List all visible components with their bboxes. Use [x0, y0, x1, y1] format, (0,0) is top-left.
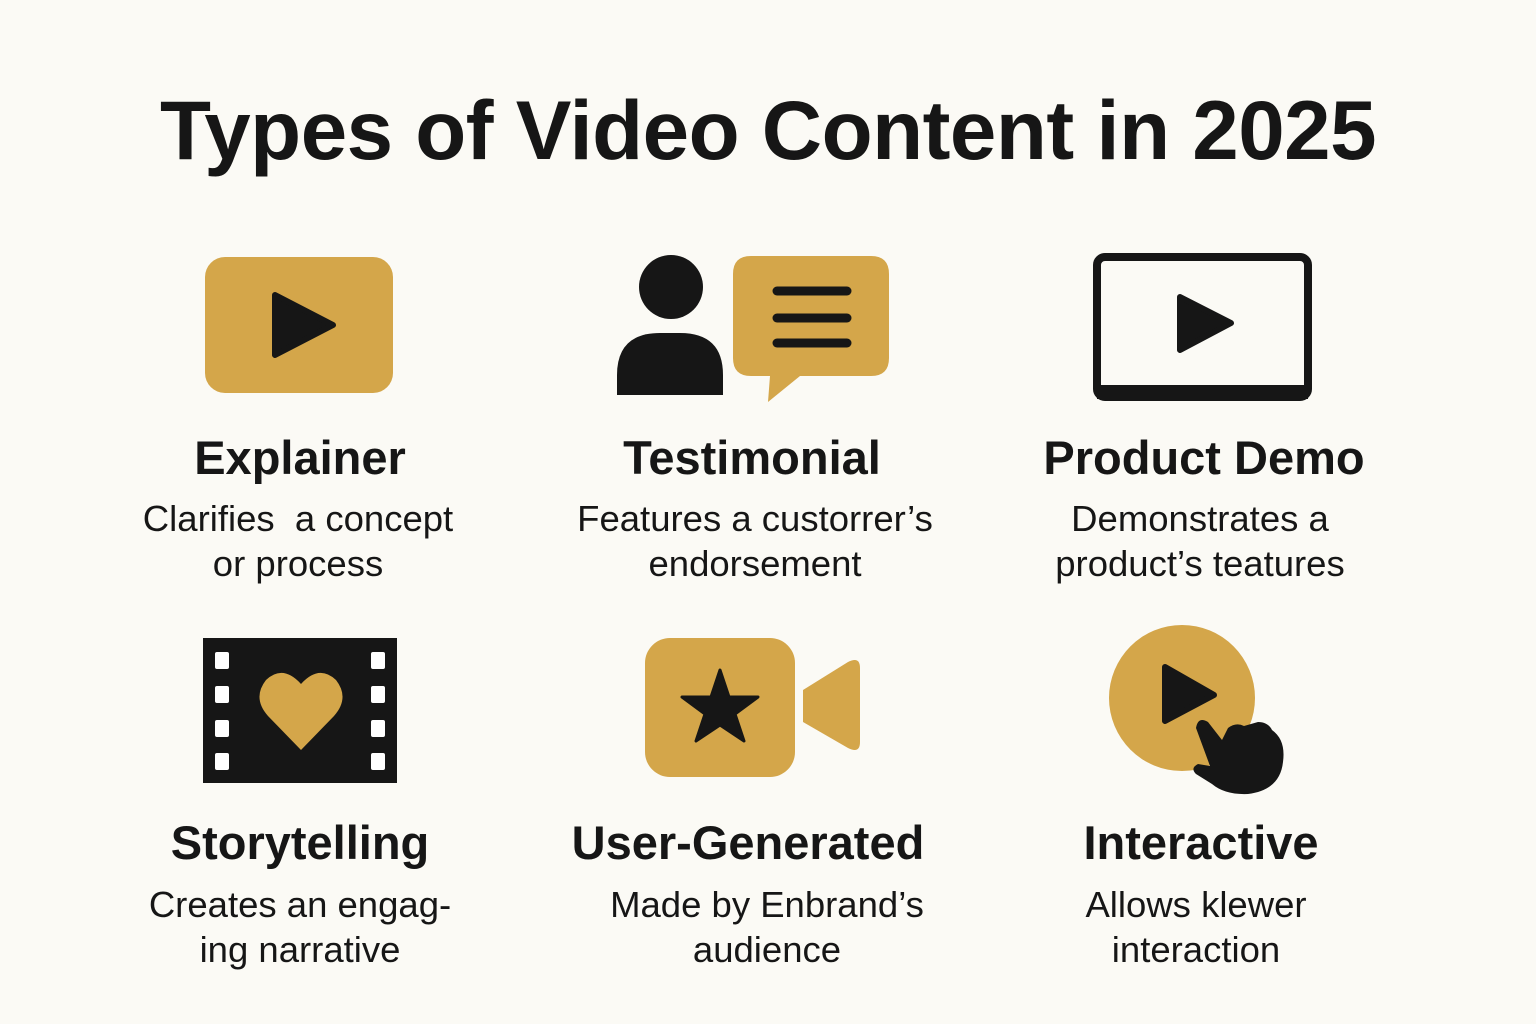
icon: interactive — [1109, 625, 1284, 794]
heading: product demo: Product Demo — [1043, 431, 1365, 484]
text: explainer: Clarifies a concept — [143, 498, 453, 539]
heading: testimonial: Testimonial — [623, 431, 881, 484]
icon: product demo screen — [1097, 257, 1308, 399]
text: explainer — [143, 498, 453, 584]
text: user-generated — [610, 884, 924, 970]
heading: storytelling: Storytelling — [171, 816, 429, 869]
text: user-generated: audience — [693, 929, 841, 970]
text: product demo: product’s teatures — [1055, 543, 1345, 584]
heading: user-generated: User-Generated — [572, 816, 924, 869]
text: user-generated: Made by Enbrand’s — [610, 884, 924, 925]
icon: explainer play — [205, 257, 393, 393]
icon: storytelling film — [203, 638, 397, 783]
text: storytelling: ing narrative — [200, 929, 400, 970]
text: storytelling: Creates an engag- — [149, 884, 451, 925]
text: testimonial: endorsement — [648, 543, 862, 584]
text: product demo: Demonstrates a — [1071, 498, 1329, 539]
text: testimonial — [577, 498, 933, 584]
icon: user-generated camera — [645, 638, 860, 777]
title: Types of Video Content in 2025 — [160, 83, 1376, 177]
text: interactive: interaction — [1112, 929, 1280, 970]
text: interactive: Allows klewer — [1085, 884, 1307, 925]
heading: interactive: Interactive — [1083, 816, 1319, 869]
text: product demo — [1055, 498, 1345, 584]
text: interactive — [1085, 884, 1307, 970]
text: testimonial: Features a custorrer’s — [577, 498, 933, 539]
text: storytelling — [149, 884, 451, 970]
icon: testimonial — [617, 255, 889, 402]
text: explainer: or process — [213, 543, 383, 584]
heading: explainer: Explainer — [194, 431, 406, 484]
